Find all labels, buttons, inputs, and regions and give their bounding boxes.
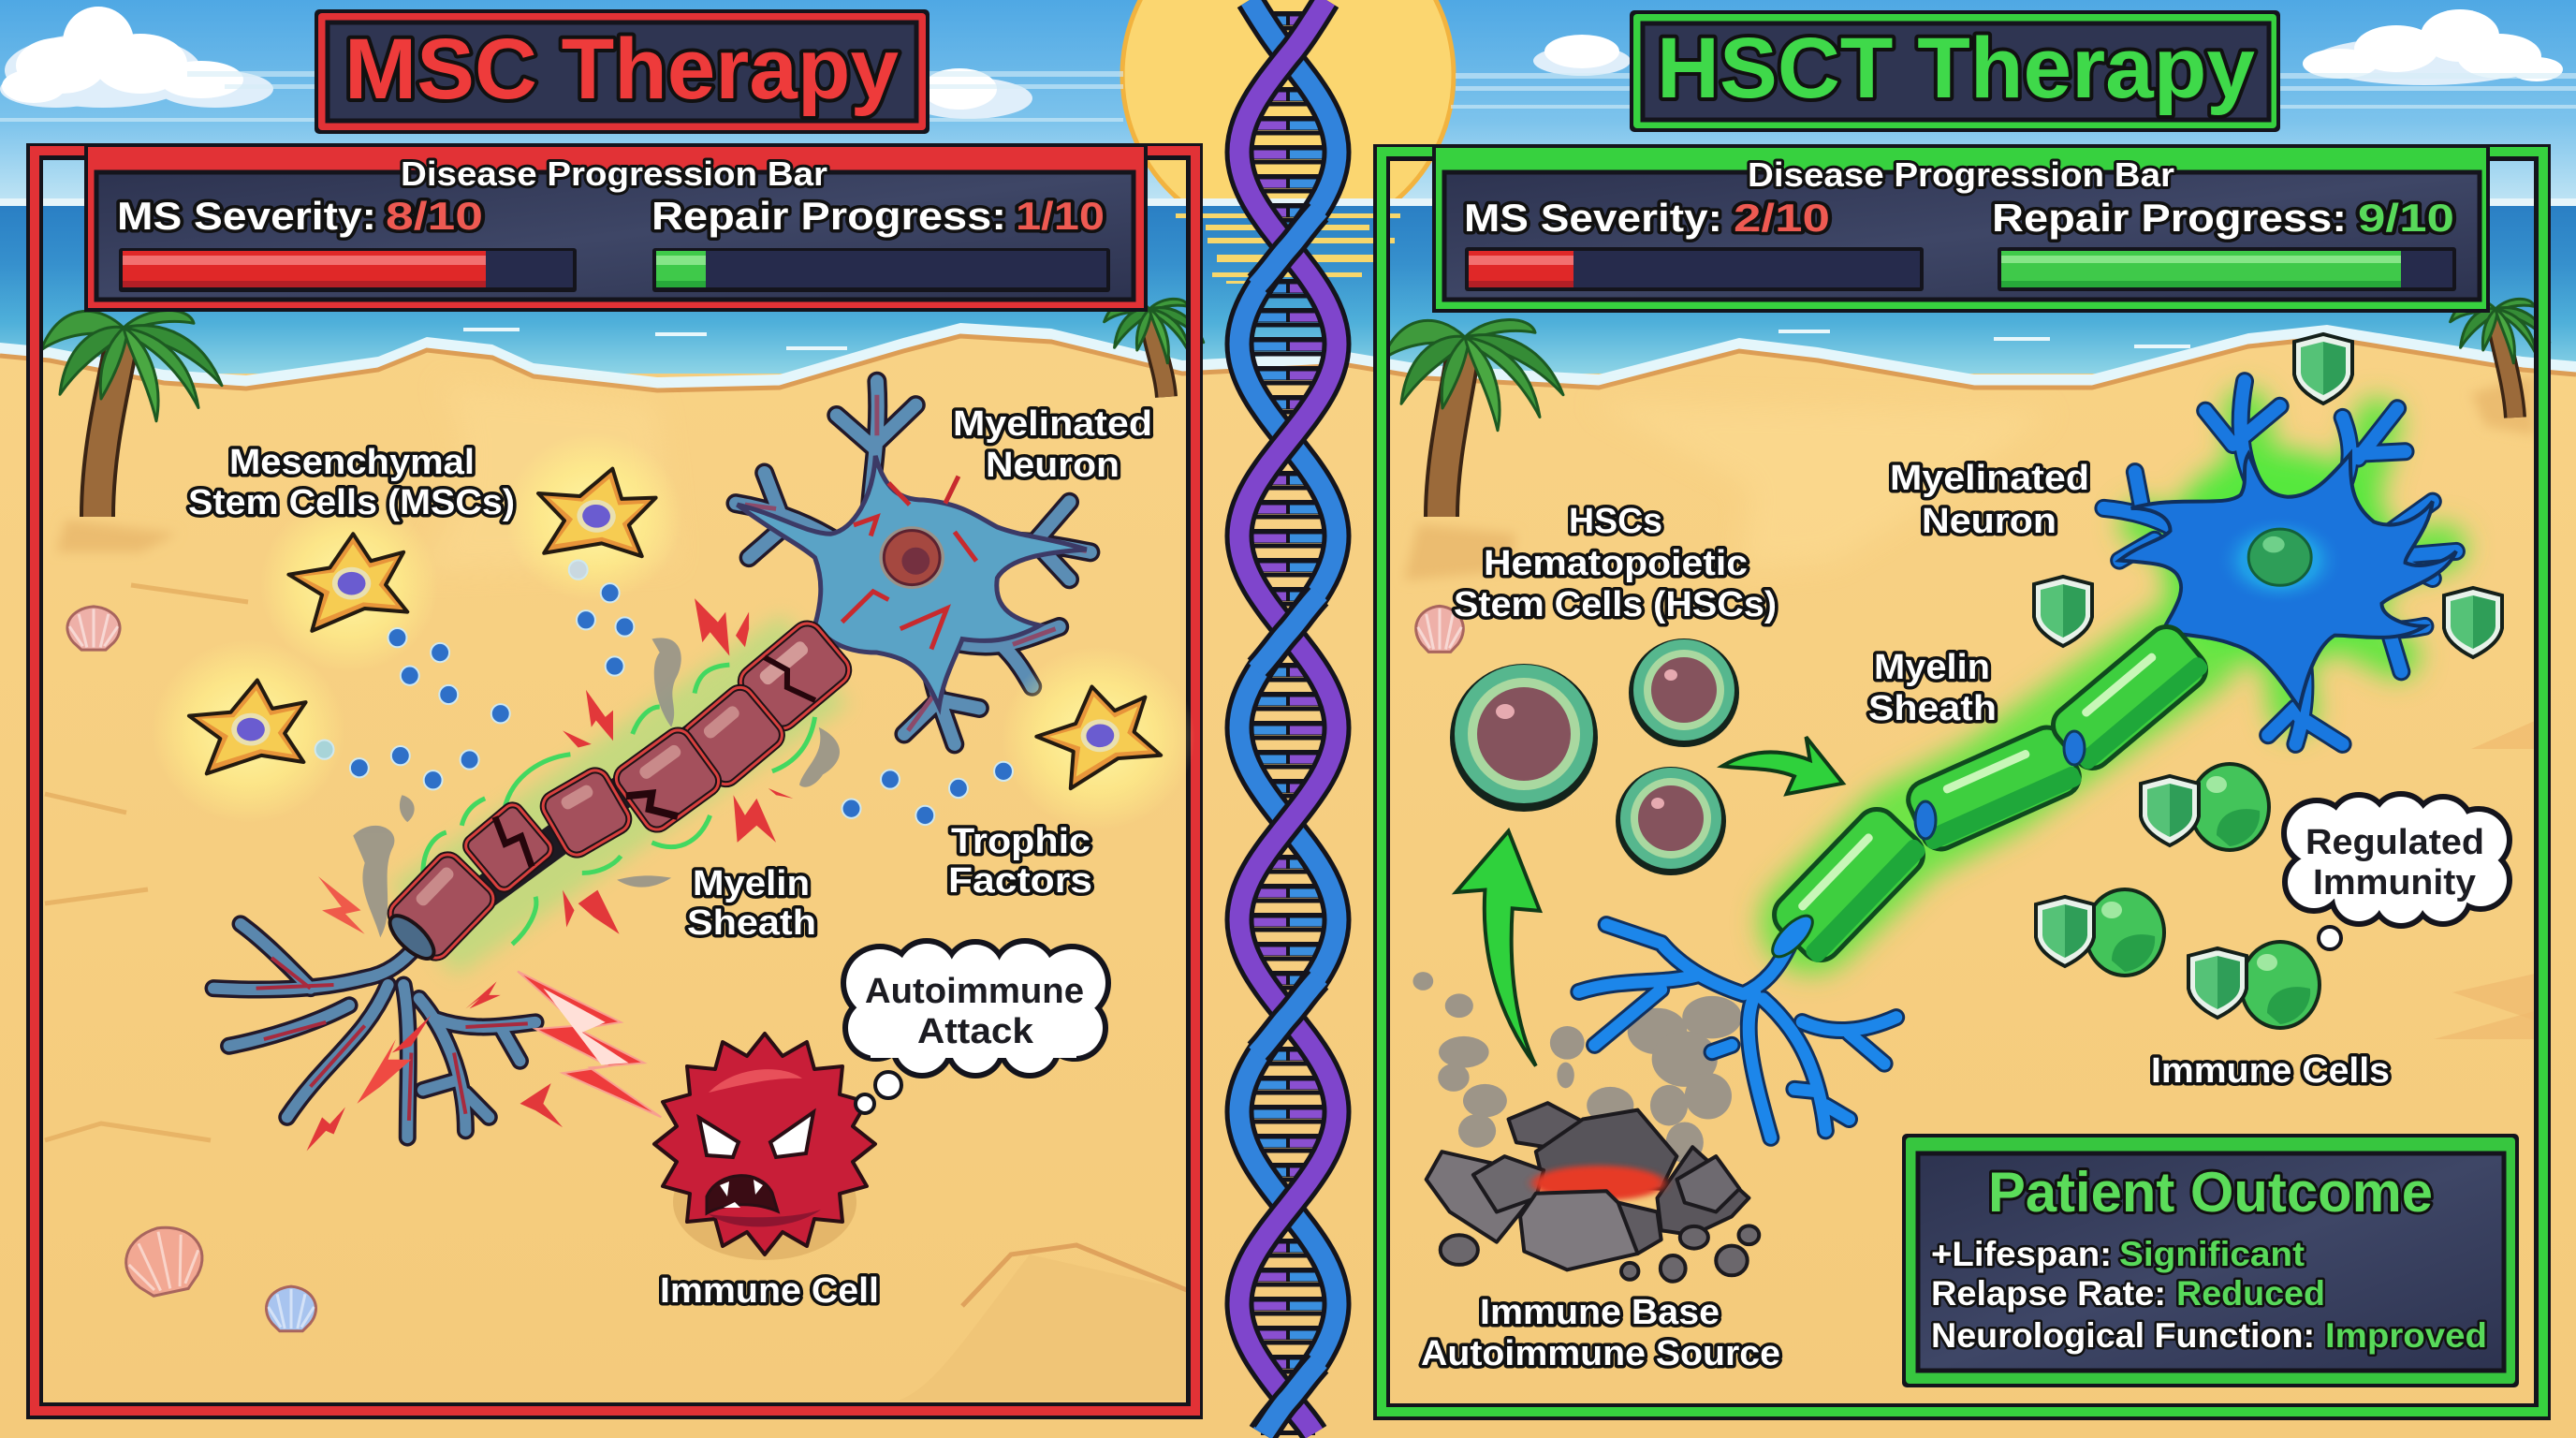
immune base: smouldering rock pile [1412, 972, 1759, 1282]
rocks [1427, 1103, 1749, 1242]
callout: patient outcome: +Lifespan: [1931, 1235, 2112, 1273]
green wisps [423, 665, 815, 945]
stat panel: MSC disease progression bar: Disease Progression Bar [401, 154, 827, 193]
DNA double helix divider [1237, 0, 1339, 1435]
lava glow [1532, 1166, 1665, 1201]
thought bubble: autoimmune attack [844, 942, 1107, 1113]
axon core [423, 646, 823, 937]
labels: MSC panel: Factors [948, 861, 1092, 901]
repair bar 1/10 [652, 248, 1110, 292]
labels: MSC panel: Trophic [951, 822, 1090, 861]
callout: patient outcome [1902, 1134, 2519, 1387]
stat panel: MSC disease progression bar: MS Severity: [117, 194, 376, 238]
labels: MSC panel: Immune Cell [660, 1271, 879, 1311]
stat panel: MSC disease progression bar: Repair Progress: [651, 194, 1006, 238]
stat panel: HSCT disease progression bar: Repair Progress: [1992, 196, 2347, 240]
panel: HSCT therapy [1382, 10, 2543, 1412]
sand shoreline [0, 336, 2576, 390]
stat panel: HSCT disease progression bar: Disease Progression Bar [1748, 155, 2174, 194]
healthy neuron glow [1811, 412, 2443, 922]
severity bar 8/10 [119, 248, 577, 292]
labels: HSCT panel: Stem Cells (HSCs) [1454, 585, 1777, 624]
healthy myelin sheath segments [1765, 619, 2214, 969]
labels: HSCT panel: Myelin [1874, 648, 1990, 687]
labels: MSC panel: Myelin [693, 864, 810, 903]
callout: patient outcome: Neurological Function: [1931, 1316, 2315, 1355]
myelin sheath segments, damaged [378, 617, 855, 971]
palm tree left panel left [41, 311, 222, 517]
arrow: base up to stem cells [1456, 831, 1540, 1066]
panel frame [1382, 152, 2543, 1412]
hematopoietic stem cells [1450, 638, 1739, 875]
labels: MSC panel: Mesenchymal [229, 443, 475, 482]
front rocks [1441, 1191, 1759, 1282]
stat panel: HSCT disease progression bar: MS Severity: [1464, 196, 1722, 240]
labels: MSC panel: Sheath [687, 903, 816, 943]
stat panel: MSC disease progression bar: 1/10 [1016, 194, 1105, 238]
red lightning sparks [306, 598, 793, 1152]
title: MSC Therapy: MSC Therapy [344, 22, 899, 117]
trophic factor dots [315, 561, 1013, 825]
neuron scene, damaged [213, 381, 1090, 1152]
soma with nucleus and cracks [738, 456, 1087, 707]
labels: HSCT panel: Autoimmune Source [1421, 1334, 1780, 1373]
thought bubble: regulated immunity: Immunity [2313, 863, 2476, 902]
palm tree left panel right [1105, 299, 1204, 397]
thought bubble: autoimmune attack: Autoimmune [865, 972, 1084, 1011]
repair bar 9/10 [1998, 247, 2456, 291]
title: HSCT Therapy: HSCT Therapy [1657, 21, 2255, 116]
pixel clouds [0, 7, 2576, 122]
callout: patient outcome: Patient Outcome [1988, 1161, 2433, 1224]
thought bubble: regulated immunity: Regulated [2305, 823, 2484, 862]
sea [0, 198, 2576, 374]
labels: HSCT panel: Immune Base [1480, 1293, 1720, 1332]
thought bubble: regulated immunity [2285, 795, 2509, 949]
stat panel: MSC disease progression bar [84, 143, 1148, 312]
title: MSC Therapy [315, 9, 929, 134]
palm tree right panel right [2451, 299, 2550, 418]
labels: MSC panel: Neuron [986, 446, 1120, 485]
labels: MSC panel: Stem Cells (MSCs) [188, 483, 515, 522]
smoke [1412, 972, 1742, 1163]
callout: patient outcome: Significant [2119, 1235, 2305, 1273]
palm tree right panel left [1383, 320, 1563, 517]
labels: HSCT panel: Sheath [1868, 689, 1997, 728]
sand dunes and ripples [45, 374, 2535, 1401]
panel: MSC therapy [35, 9, 1195, 1411]
mesenchymal stem cells [152, 433, 1195, 829]
icon: angry red immune cell [654, 1034, 875, 1260]
dendrites [213, 381, 1090, 1137]
protective shields around neuron [2034, 334, 2502, 657]
callout: patient outcome: Reduced [2176, 1274, 2325, 1313]
panel frame [35, 151, 1195, 1411]
smoke wisps [353, 638, 840, 937]
beach sand [0, 334, 2576, 1438]
sea foam [0, 323, 2576, 393]
healthy neuron dendrites and soma [1579, 381, 2456, 1137]
labels: MSC panel [188, 404, 1152, 1311]
thought bubble: autoimmune attack: Attack [917, 1012, 1034, 1051]
stat panel: HSCT disease progression bar [1432, 144, 2490, 313]
labels: HSCT panel: Neuron [1922, 502, 2056, 541]
severity bar 2/10 [1465, 247, 1924, 291]
labels: HSCT panel: Myelinated [1890, 459, 2089, 498]
arrow: stem cells to neuron [1722, 737, 1843, 794]
regulated immune cells with shields [2036, 764, 2320, 1028]
labels: MSC panel: Myelinated [953, 404, 1152, 444]
labels: HSCT panel: Immune Cells [2151, 1051, 2390, 1091]
MSC scene: decorative shells [67, 607, 315, 1331]
stat panel: HSCT disease progression bar: 9/10 [2358, 196, 2454, 240]
stat panel: MSC disease progression bar: 8/10 [386, 194, 483, 238]
green repair glow [423, 659, 815, 931]
callout: patient outcome: Improved [2325, 1316, 2487, 1355]
decorative shell [1416, 606, 1463, 652]
labels: HSCT panel: Hematopoietic [1484, 544, 1748, 583]
labels: HSCT panel [1421, 459, 2390, 1373]
stat panel: HSCT disease progression bar: 2/10 [1734, 196, 1830, 240]
icon: sun [1122, 0, 1454, 241]
labels: HSCT panel: HSCs [1569, 502, 1662, 541]
callout: patient outcome: Relapse Rate: [1931, 1274, 2166, 1313]
